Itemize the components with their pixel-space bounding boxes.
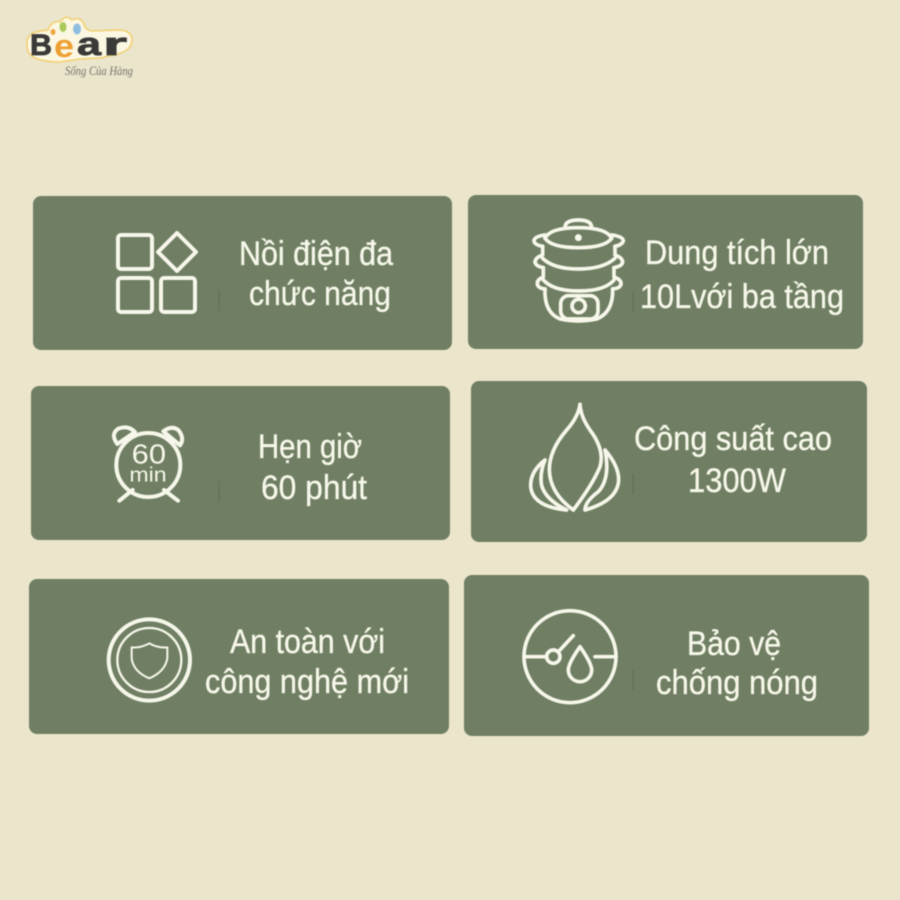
logo: Bear [27,17,133,78]
icon: alarm clock 60 min [114,427,182,501]
logo: Bear: a [77,26,101,62]
text: overheat protection: Bảo vệ [687,625,781,663]
text: high power: 1300W [688,462,786,500]
logo: Bear: e [54,28,74,64]
icon: flame [531,404,619,510]
icon: gauge and drop in circle [524,611,616,703]
icon: shield in circle [109,619,190,701]
text: large capacity [640,234,844,316]
panel: timer [31,386,450,540]
icon: squares and diamond [118,233,196,312]
panel: safety [29,579,449,734]
text: overheat protection [656,625,818,702]
text: large capacity: Dung tích lớn [645,234,829,272]
text: multifunction cooker [239,235,394,313]
logo: Bear: B [30,29,52,62]
text: multifunction cooker: chức năng [249,275,391,313]
logo: Bear: Sống Của Hàng [65,63,133,78]
icon: three-tier steamer [534,220,623,321]
panel: overheat protection [464,575,869,736]
text: timer: 60 phút [261,469,367,507]
text: timer: Hẹn giờ [258,428,362,466]
panel: large capacity [468,195,863,349]
text: multifunction cooker: Nồi điện đa [239,235,394,273]
panel: high power [471,381,867,542]
icon: alarm clock 60 min: min [129,463,167,486]
text: safety [205,623,409,701]
text: timer [258,428,367,507]
panel: multifunction cooker [33,196,452,350]
icon: alarm clock 60 min: 60 [132,438,166,469]
text: high power [634,420,832,500]
text: safety: An toàn với [230,623,385,661]
text: overheat protection: chống nóng [656,664,818,702]
logo: Bear: r [103,26,127,62]
text: safety: công nghệ mới [205,663,409,701]
text: high power: Công suất cao [634,420,832,458]
text: large capacity: 10Lvới ba tầng [640,278,844,316]
